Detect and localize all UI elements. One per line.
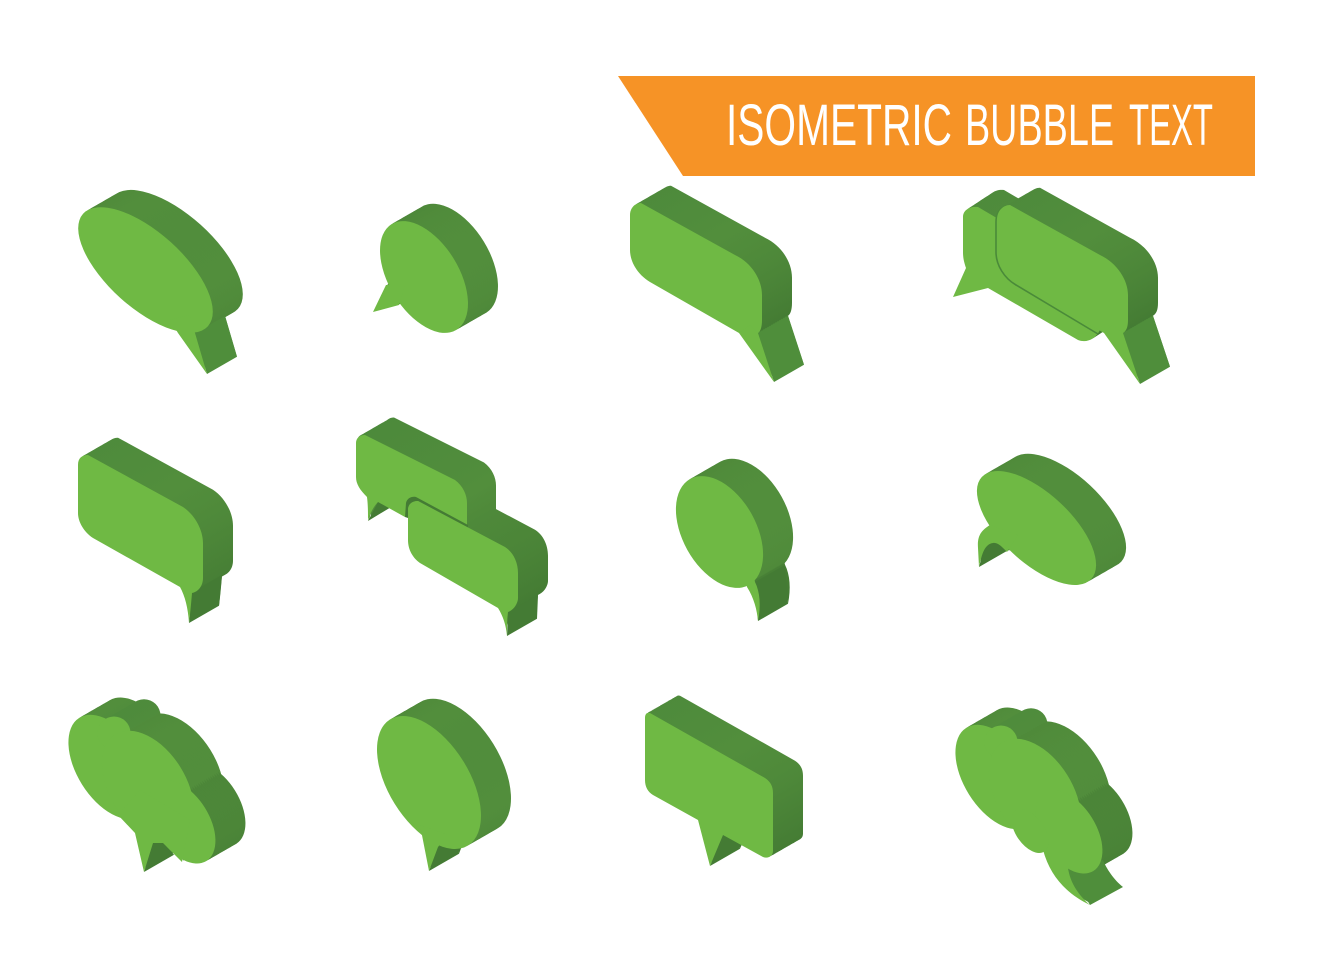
- bubble face: [630, 203, 774, 382]
- upper bubble face: [356, 435, 467, 527]
- bubble face: [958, 452, 1115, 604]
- lower bubble side: [410, 484, 548, 636]
- front bubble side: [999, 188, 1170, 384]
- icon: small round speech bubble, row 1: [362, 189, 516, 348]
- bubble side: [80, 438, 233, 623]
- bubble face: [356, 698, 502, 871]
- icon: sharp rectangle speech bubble, row 3: [645, 695, 803, 866]
- rear bubble face: [953, 207, 1100, 341]
- icon: rounded rectangle bubble with curved tail, row 2: [78, 438, 233, 623]
- title text: ISOMETRIC: [726, 93, 952, 158]
- bubble side: [60, 169, 263, 374]
- title text: [726, 93, 1213, 158]
- bubble side: [358, 681, 532, 871]
- icon: double rectangle speech bubble, row 1: [953, 188, 1170, 384]
- icon: wide oval bubble with curved tail, row 2: [958, 434, 1145, 604]
- bubble side: [53, 683, 259, 874]
- icon: round bubble with curved tail, row 2: [658, 444, 811, 621]
- bubble side: [364, 189, 516, 347]
- title text: BUBBLE: [965, 93, 1114, 158]
- bubble face: [58, 186, 233, 374]
- icon: oval speech bubble, row 1: [58, 169, 263, 374]
- bubble side: [960, 434, 1145, 603]
- bubble side: [940, 693, 1146, 905]
- icon: tall oval bubble, row 3: [356, 681, 532, 871]
- bubble face: [51, 700, 229, 875]
- icon: cloud thought bubble, row 3: [51, 683, 259, 875]
- title text: TEXT: [1129, 93, 1213, 158]
- icon: two overlapping speech bubbles, row 2: [356, 418, 548, 636]
- bubble face: [78, 455, 203, 623]
- bubble side: [647, 695, 803, 866]
- bubble side: [660, 444, 811, 621]
- bubble face: [658, 461, 781, 621]
- bubble face: [362, 206, 486, 348]
- bubble face: [938, 710, 1116, 905]
- lower bubble face: [408, 501, 518, 636]
- upper bubble side: [357, 418, 496, 526]
- bubble side: [632, 186, 804, 382]
- bubble face: [645, 713, 773, 866]
- lower bubble rim: [405, 497, 468, 528]
- front bubble face: [997, 205, 1140, 384]
- title banner: [618, 76, 1255, 176]
- icon: cloud thought bubble with curved tail, row 3: [938, 693, 1146, 905]
- front bubble outline: [996, 206, 1098, 334]
- rear bubble side: [955, 190, 1126, 340]
- icon: rounded rectangle speech bubble, row 1: [630, 186, 804, 382]
